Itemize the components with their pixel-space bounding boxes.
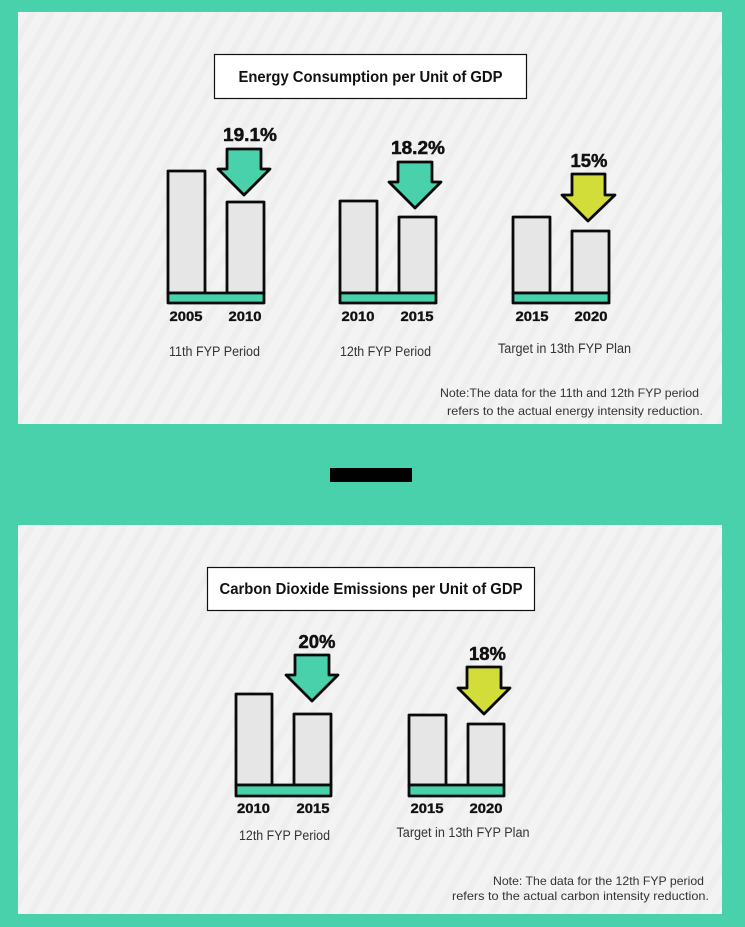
note: carbon: Note: The data for the 12th FYP period [493, 874, 704, 888]
chart: 12th FYP period [340, 137, 445, 359]
note: energy: refers to the actual energy intensity reduction. [447, 404, 703, 418]
value: 18%: 18% [469, 643, 506, 664]
year labels: 2015 [516, 308, 549, 324]
arrow: 19.1% decrease [218, 149, 270, 195]
year labels: 2015 [410, 800, 444, 816]
note: energy: Note:The data for the 11th and 12th FYP period [440, 386, 699, 400]
note: carbon [452, 874, 709, 903]
chart: target in 13th FYP plan [396, 643, 530, 840]
divider: black bar [330, 468, 412, 482]
year labels [410, 800, 503, 816]
year labels [516, 308, 608, 324]
arrow: 20% decrease [286, 655, 338, 701]
arrow: 15% target decrease [562, 174, 615, 221]
title: carbon dioxide [208, 568, 534, 610]
year labels: 2020 [470, 800, 503, 816]
year labels: 2010 [237, 800, 270, 816]
chart: 11th FYP period [168, 124, 277, 359]
value: 15%: 15% [570, 150, 608, 171]
value: 20%: 20% [298, 631, 336, 652]
title: carbon dioxide: Carbon Dioxide Emissions per Unit of GDP [220, 581, 523, 598]
note: energy [440, 386, 703, 418]
period label: Target in 13th FYP Plan [498, 341, 631, 356]
period label: 12th FYP Period [340, 344, 431, 359]
year labels: 2005 [170, 308, 203, 324]
arrow: 18.2% decrease [389, 162, 441, 208]
year labels: 2010 [342, 308, 375, 324]
year labels: 2020 [574, 308, 608, 324]
title: energy consumption: Energy Consumption per Unit of GDP [238, 69, 503, 86]
year labels [170, 308, 262, 324]
year labels [237, 800, 330, 816]
year labels: 2015 [296, 800, 330, 816]
year labels: 2010 [228, 308, 262, 324]
value: 18.2%: 18.2% [391, 137, 445, 158]
title: energy consumption [214, 54, 526, 98]
panel: energy consumption [18, 12, 722, 424]
panel: carbon dioxide emissions [18, 525, 722, 914]
period label: 12th FYP Period [239, 828, 330, 843]
period label: 11th FYP Period [169, 344, 260, 359]
chart: 12th FYP period [236, 631, 338, 843]
value: 19.1%: 19.1% [223, 124, 277, 145]
year labels [342, 308, 434, 324]
year labels: 2015 [400, 308, 434, 324]
arrow: 18% target decrease [458, 667, 510, 714]
period label: Target in 13th FYP Plan [396, 825, 530, 840]
note: carbon: refers to the actual carbon intensity reduction. [452, 889, 709, 903]
chart: target in 13th FYP plan [498, 150, 631, 356]
